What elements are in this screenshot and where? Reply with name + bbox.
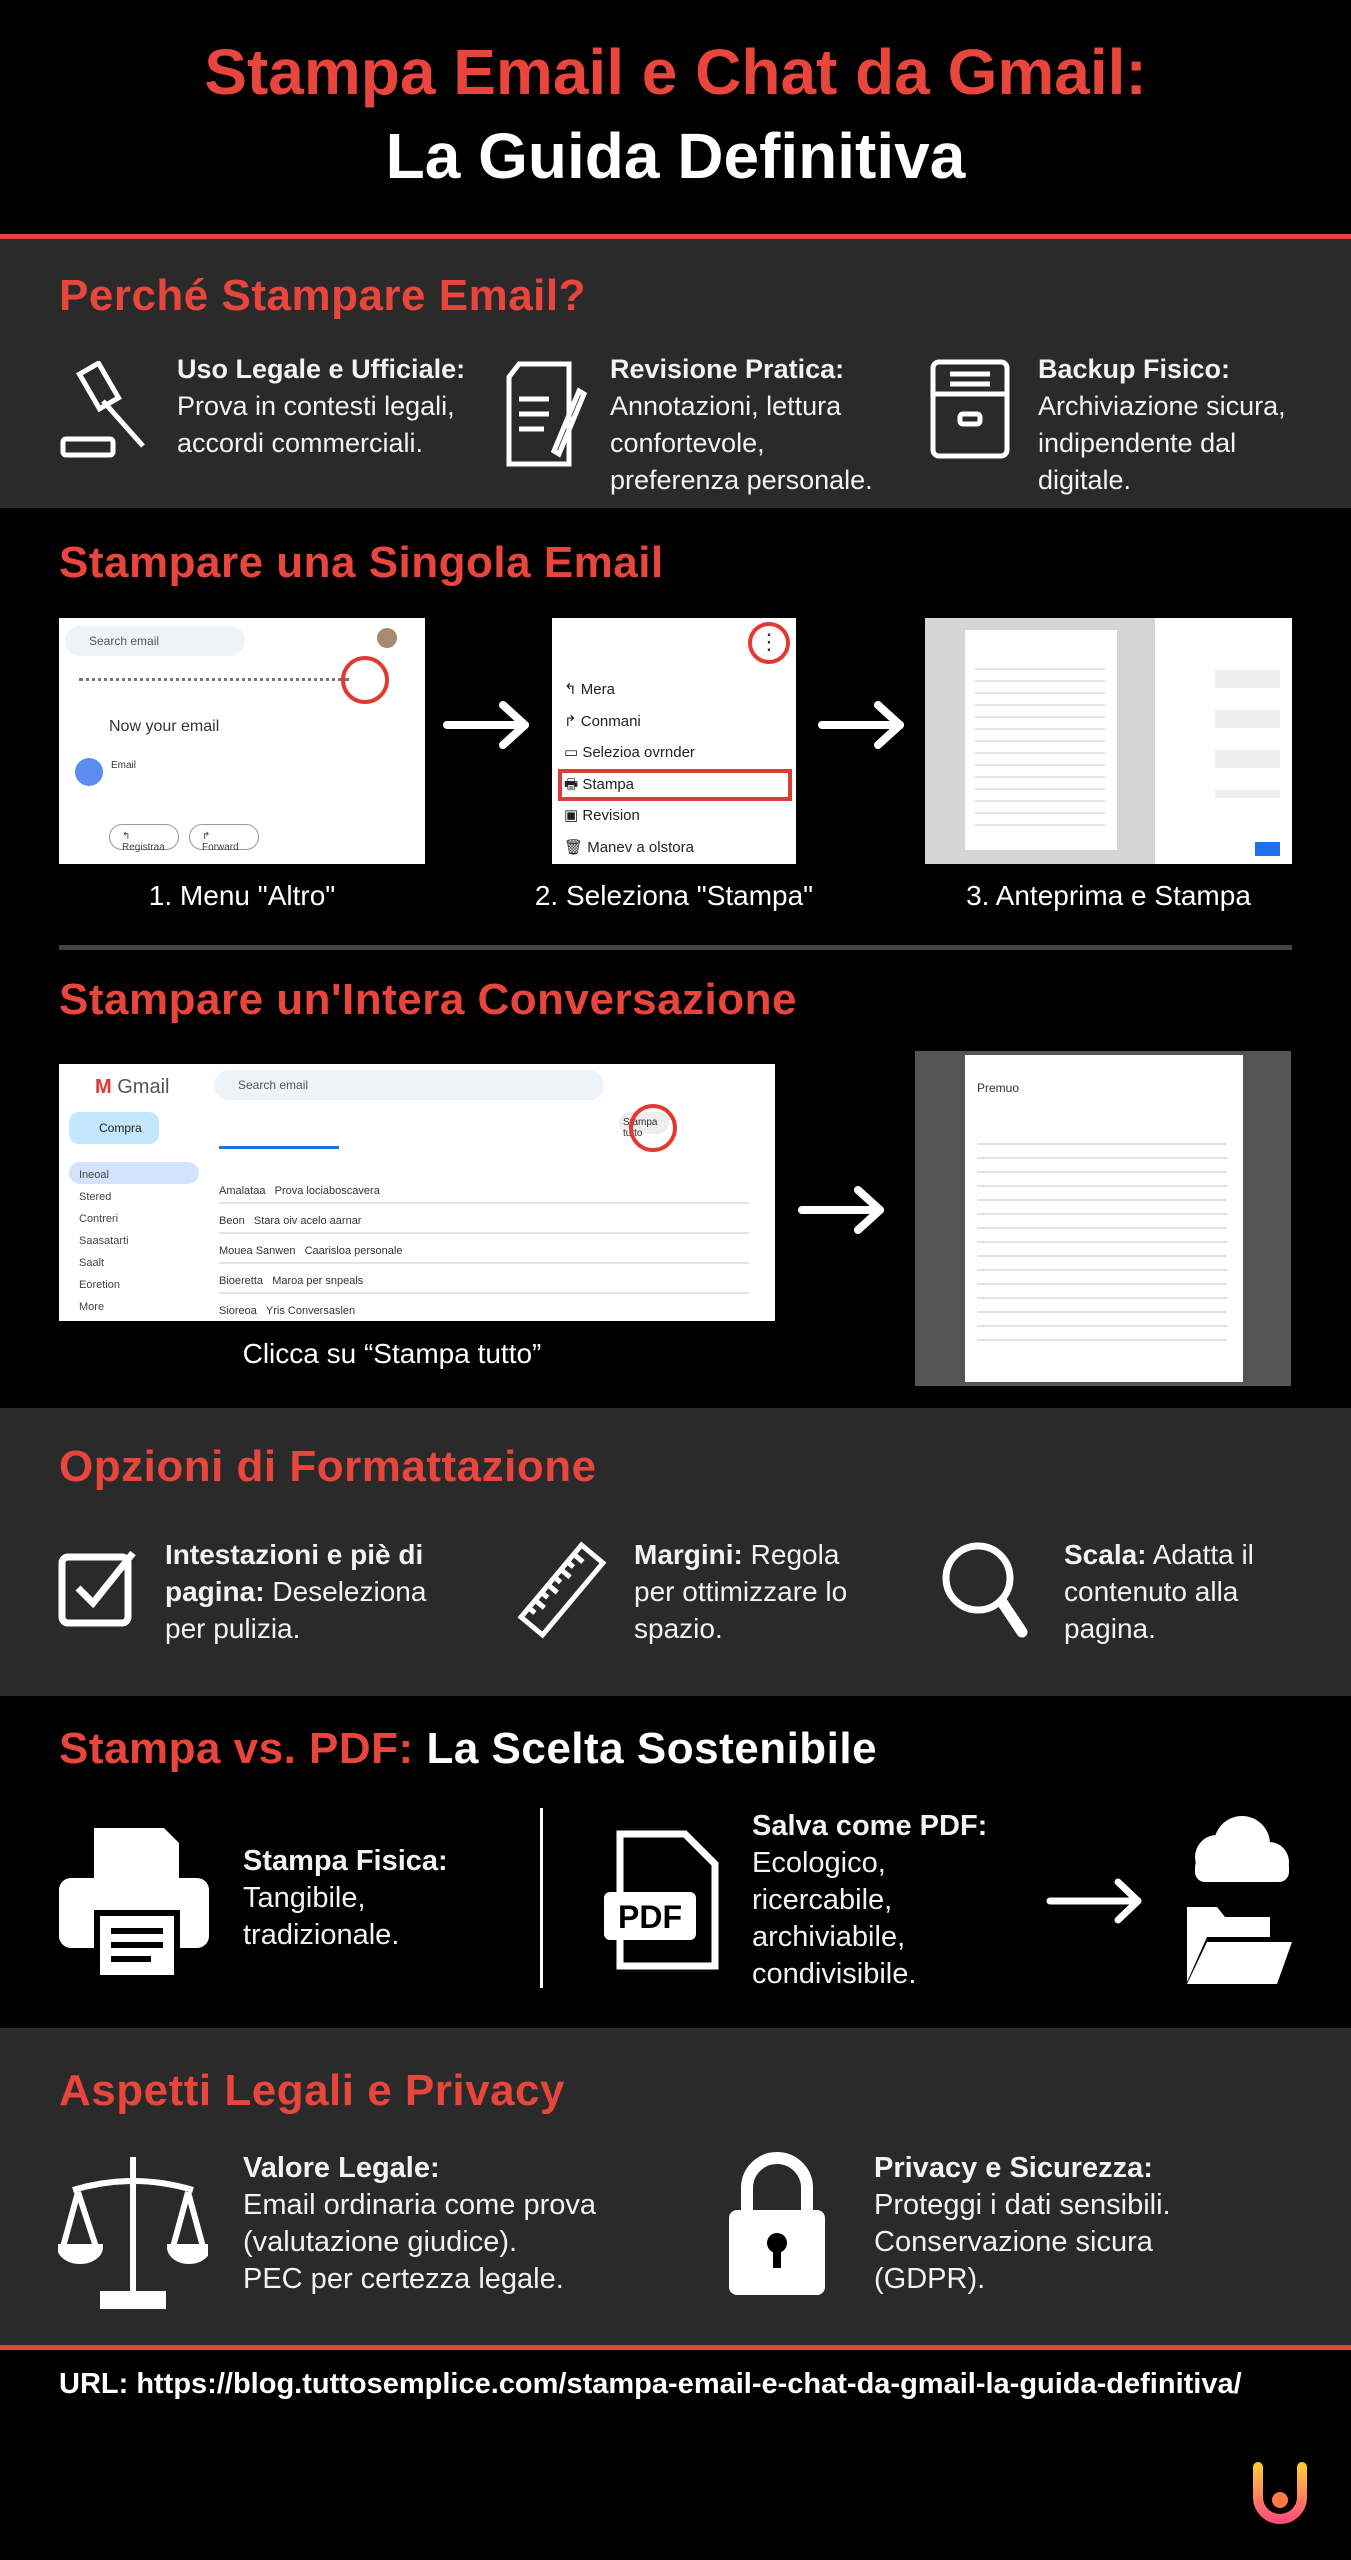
heading: conversazione: Stampare un'Intera Conversazione [59, 975, 797, 1024]
text: intestazioni: pagina: Deseleziona [165, 1576, 426, 1607]
screenshot 2: seleziona stampa: ⋮ [758, 629, 780, 654]
text: privacy [874, 2152, 1171, 2295]
screenshot: print preview conversation: Premuo [977, 1081, 1019, 1095]
text: revisione: confortevole, [610, 428, 765, 458]
text: uso legale: accordi commerciali. [177, 428, 423, 458]
screenshot: gmail inbox: Bioeretta Maroa per snpeals [219, 1275, 363, 1287]
icon: magnifier [942, 1542, 1028, 1638]
screenshot 2: seleziona stampa: ↰ Mera [564, 681, 615, 698]
icon: scales [58, 2157, 208, 2309]
text: revisione: Revisione Pratica: [610, 354, 844, 384]
caption: stampa tutto: Clicca su “Stampa tutto” [243, 1338, 541, 1369]
heading: opzioni: Opzioni di Formattazione [59, 1442, 597, 1491]
text: 2. Seleziona "Stampa" [535, 880, 813, 911]
text: intestazioni: Intestazioni e piè di [165, 1539, 423, 1570]
text: backup: Backup Fisico: [1038, 354, 1230, 384]
screenshot 1: menu altro: Email [111, 760, 136, 771]
text: stampa fisica: Stampa Fisica: [243, 1845, 448, 1877]
text: valore legale: PEC per certezza legale. [243, 2263, 564, 2295]
panel: aspetti legali [0, 2028, 1351, 2345]
icon: printer [59, 1828, 209, 1975]
text: salva pdf: Salva come PDF: [752, 1810, 987, 1842]
title: La Guida Definitiva [386, 120, 965, 192]
screenshot: gmail inbox: Saalt [79, 1257, 104, 1269]
icon: checkbox [58, 1550, 136, 1626]
icon: archive box [930, 360, 1010, 458]
text: intestazioni: per pulizia. [165, 1613, 300, 1644]
text: salva pdf: Ecologico, [752, 1847, 886, 1879]
screenshot 1: menu altro: ↰ Registraa [122, 831, 165, 853]
text: salva pdf [752, 1810, 987, 1990]
icon: cloud and folder [1187, 1816, 1292, 1984]
heading: perché: Perché Stampare Email? [59, 271, 586, 320]
text: salva pdf: archiviabile, [752, 1921, 905, 1953]
title: Stampa Email e Chat da Gmail: [204, 36, 1147, 108]
text: revisione [610, 354, 873, 495]
icon: gavel [60, 361, 145, 458]
text: valore legale: Valore Legale: [243, 2152, 440, 2184]
heading: stampa vs pdf: Stampa vs. PDF: La Scelta Sostenibile [59, 1724, 877, 1773]
text: scala: pagina. [1064, 1613, 1156, 1644]
screenshot: gmail inbox: Ineoal [79, 1169, 109, 1181]
text: revisione: Annotazioni, lettura [610, 391, 841, 421]
logo [1253, 2462, 1307, 2524]
text: margini [634, 1539, 847, 1644]
screenshot 2: seleziona stampa [552, 618, 796, 864]
screenshot 1: menu altro: ↱ Forward [202, 831, 239, 853]
screenshot 2: seleziona stampa: 🖶 Stampa [564, 776, 634, 792]
text: scala: contenuto alla [1064, 1576, 1238, 1607]
icon: pdf [604, 1830, 718, 1970]
text: privacy: Privacy e Sicurezza: [874, 2152, 1153, 2184]
text: salva pdf: condivisibile. [752, 1958, 916, 1990]
screenshot: print preview conversation [915, 1051, 1291, 1386]
screenshot 1: menu altro: Now your email [109, 718, 219, 735]
heading: legali: Aspetti Legali e Privacy [59, 2066, 565, 2115]
arrow 4 [1046, 1878, 1142, 1924]
screenshot: gmail inbox: Beon Stara oiv acelo aarnar [219, 1215, 361, 1227]
screenshot: gmail inbox: M Gmail [95, 1076, 169, 1098]
screenshot: gmail inbox: More [79, 1301, 104, 1313]
screenshot: gmail inbox: Stered [79, 1191, 111, 1203]
screenshot: gmail inbox: Search email [238, 1078, 308, 1092]
title [204, 36, 1147, 192]
screenshot: gmail inbox: Compra [99, 1121, 142, 1135]
screenshot 2: seleziona stampa: ▭ Selezioa ovrnder [564, 744, 695, 761]
text: margini: Margini: Regola [634, 1539, 839, 1570]
screenshot: gmail inbox: Sioreoa Yris Conversaslen [219, 1305, 355, 1317]
screenshot 2: seleziona stampa: ▣ Revision [564, 807, 640, 824]
text: privacy: Conservazione sicura [874, 2226, 1153, 2258]
screenshot 1: menu altro: Search email [89, 634, 159, 648]
screenshot: gmail inbox: Contreri [79, 1213, 118, 1225]
text: backup: indipendente dal [1038, 428, 1236, 458]
arrow 1 [443, 701, 529, 749]
screenshot 2: seleziona stampa: ↱ Conmani [564, 712, 641, 730]
text: uso legale: Prova in contesti legali, [177, 391, 455, 421]
heading: singola email: Stampare una Singola Email [59, 538, 664, 587]
screenshot: gmail inbox: Amalataa Prova lociaboscavera [219, 1185, 380, 1197]
text: valore legale: Email ordinaria come prova [243, 2189, 596, 2221]
icon: ruler [518, 1542, 606, 1638]
screenshot 2: seleziona stampa: 🗑 Manev a olstora [564, 838, 694, 856]
screenshot: gmail inbox [59, 1064, 775, 1321]
text: backup: digitale. [1038, 465, 1131, 495]
url footer: URL: https://blog.tuttosemplice.com/stampa-email-e-chat-da-gmail-la-guida-definitiva/ [59, 2368, 1242, 2400]
arrow 3 [798, 1186, 884, 1234]
screenshot: gmail inbox: Eoretion [79, 1279, 120, 1291]
icon: pdf: PDF [618, 1899, 682, 1935]
text: stampa fisica: tradizionale. [243, 1919, 399, 1951]
screenshot 3: anteprima [925, 618, 1292, 864]
screenshot: gmail inbox: Mouea Sanwen Caarisloa personale [219, 1245, 402, 1257]
text: revisione: preferenza personale. [610, 465, 873, 495]
text: intestazioni [165, 1539, 426, 1644]
text: uso legale: Uso Legale e Ufficiale: [177, 354, 465, 384]
captions steps: 1. Menu "Altro" [149, 880, 335, 911]
panel: opzioni formattazione [0, 1408, 1351, 1696]
text: margini: per ottimizzare lo [634, 1576, 847, 1607]
screenshot: gmail inbox: Saasatarti [79, 1235, 129, 1247]
text: privacy: (GDPR). [874, 2263, 985, 2295]
arrow 2 [818, 701, 904, 749]
text: backup [1038, 354, 1286, 495]
text: scala [1064, 1539, 1254, 1644]
text: scala: Scala: Adatta il [1064, 1539, 1254, 1570]
text: 3. Anteprima e Stampa [966, 880, 1251, 911]
icon: document [506, 362, 588, 466]
screenshot: gmail inbox: Stampa tutto [623, 1117, 657, 1139]
text: valore legale: (valutazione giudice). [243, 2226, 517, 2258]
screenshot 1: menu altro [59, 618, 425, 864]
text: stampa fisica [243, 1845, 448, 1951]
text: uso legale [177, 354, 465, 458]
text: privacy: Proteggi i dati sensibili. [874, 2189, 1171, 2221]
panel: perché stampare [0, 239, 1351, 508]
text: stampa fisica: Tangibile, [243, 1882, 366, 1914]
text: salva pdf: ricercabile, [752, 1884, 892, 1916]
text: valore legale [243, 2152, 596, 2295]
icon: lock [729, 2152, 825, 2295]
text: backup: Archiviazione sicura, [1038, 391, 1286, 421]
text: margini: spazio. [634, 1613, 723, 1644]
